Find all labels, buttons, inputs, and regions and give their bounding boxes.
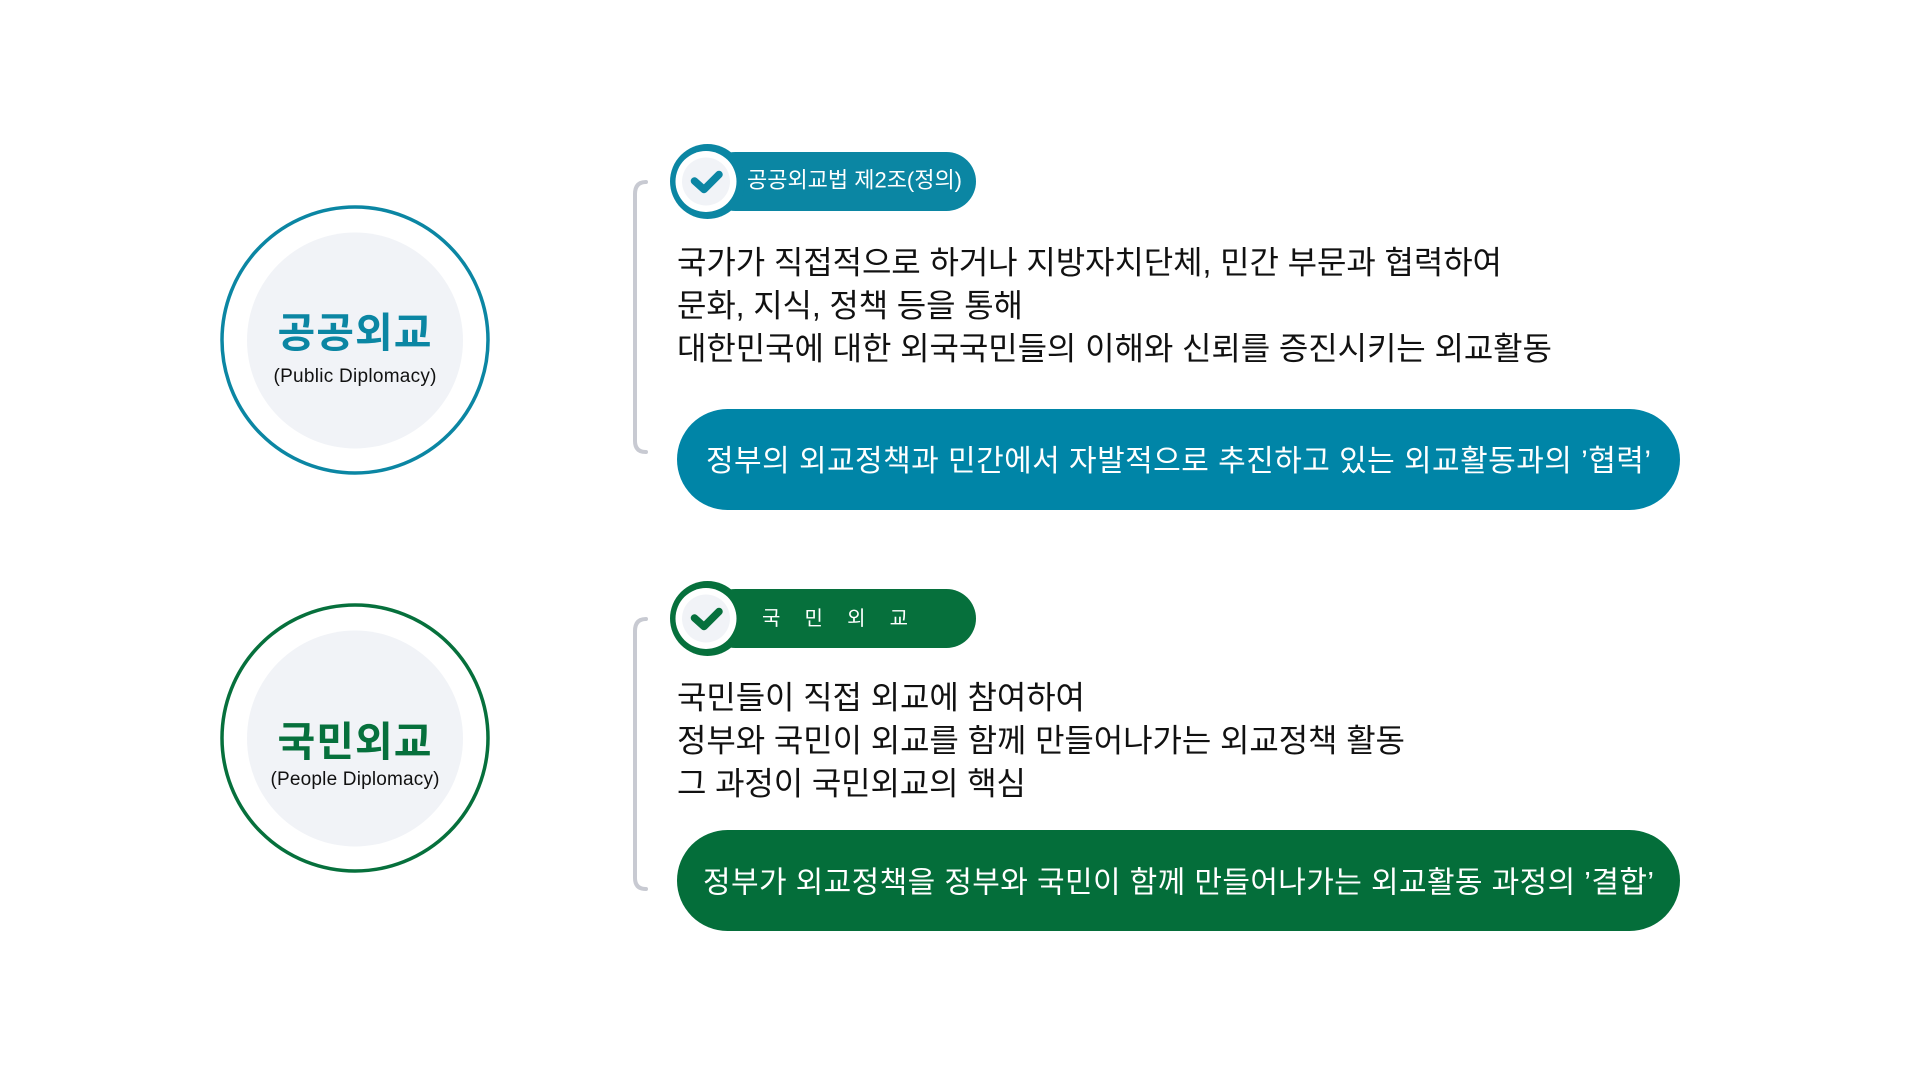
subtitle: public diplomacy: (Public Diplomacy) [274,366,436,387]
circle: public diplomacy [222,207,488,473]
subtitle: people diplomacy: (People Diplomacy) [270,769,440,790]
text block: people diplomacy definition: 그 과정이 국민외교의 핵심 [677,766,1026,802]
heading: people diplomacy: 국민외교 [278,719,432,765]
icon: check mark [694,612,719,626]
text block: people diplomacy definition [677,680,1405,802]
icon: check mark [694,174,719,190]
heading: public diplomacy: 공공외교 [278,310,432,356]
text block: public diplomacy definition: 문화, 지식, 정책 등을 통해 [677,288,1023,324]
callout: cooperation [677,409,1680,510]
panel: public diplomacy [222,144,1680,510]
badge: public diplomacy law [670,144,976,219]
callout: combination [677,830,1680,931]
text block: people diplomacy definition: 정부와 국민이 외교를 함께 만들어나가는 외교정책 활동 [677,722,1405,758]
callout: combination: 정부가 외교정책을 정부와 국민이 함께 만들어나가는 외교활동 과정의 ’결합’ [703,866,1654,900]
panel: people diplomacy [222,581,1680,931]
text block: public diplomacy definition: 국가가 직접적으로 하거나 지방자치단체, 민간 부문과 협력하여 [677,244,1502,280]
text block: people diplomacy definition: 국민들이 직접 외교에 참여하여 [677,680,1085,716]
bracket: public diplomacy [635,182,646,452]
bracket: people diplomacy [635,619,646,889]
badge label: 공공외교법 제2조(정의) [747,168,962,192]
callout: cooperation: 정부의 외교정책과 민간에서 자발적으로 추진하고 있는 외교활동과의 ’협력’ [706,445,1651,478]
badge: people diplomacy [670,581,976,656]
badge label: 국 민 외 교 [762,607,908,630]
text block: public diplomacy definition: 대한민국에 대한 외국국민들의 이해와 신뢰를 증진시키는 외교활동 [677,330,1552,366]
circle: people diplomacy [222,605,488,871]
text block: public diplomacy definition [677,244,1552,366]
